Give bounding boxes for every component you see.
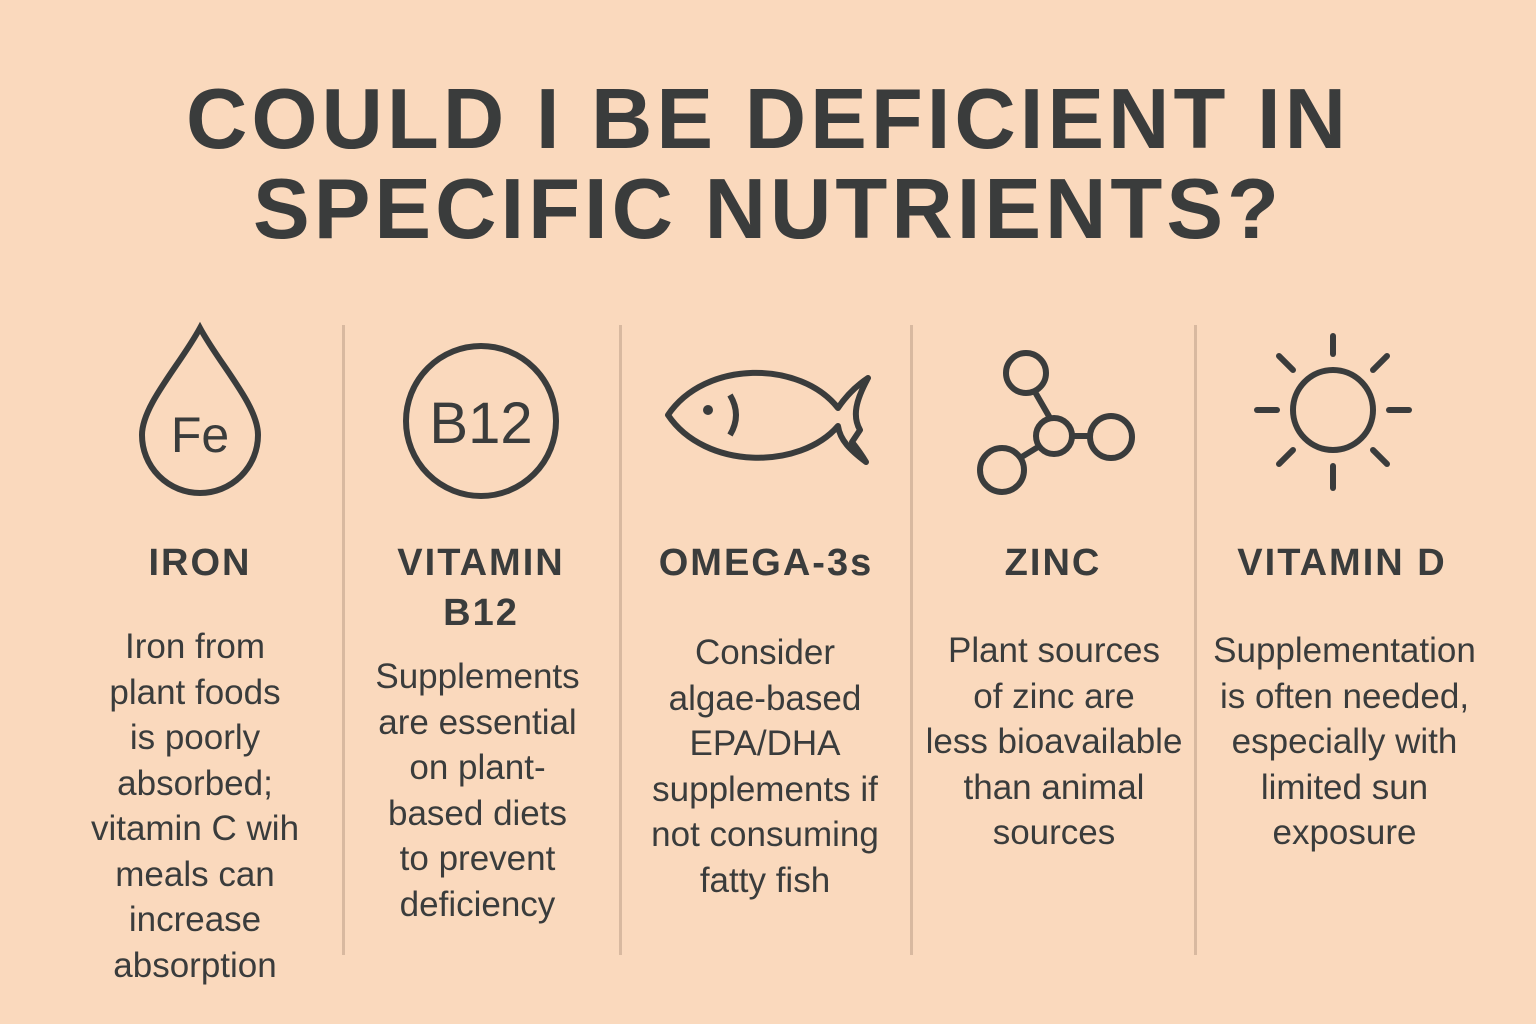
body: iron: absorption — [113, 946, 277, 984]
body: vitamin d: Supplementation — [1213, 631, 1476, 670]
body: b12: deficiency — [400, 884, 555, 924]
body: omega: EPA/DHA — [689, 724, 841, 763]
body: iron: increase — [129, 900, 261, 939]
body: vitamin d: limited sun — [1261, 768, 1428, 806]
body: iron: is poorly — [130, 718, 260, 757]
body: zinc: sources — [993, 813, 1115, 852]
body: omega: supplements if — [652, 770, 878, 808]
icon: sun — [1254, 333, 1412, 491]
heading: zinc: ZINC — [1005, 542, 1101, 584]
heading: vitamin d: VITAMIN D — [1237, 542, 1447, 584]
body: iron: vitamin C wih — [91, 809, 299, 848]
body: b12: on plant- — [409, 748, 546, 787]
icon: iron drop: Fe — [171, 407, 229, 463]
heading: b12 — [397, 542, 565, 634]
icon: iron drop — [139, 322, 261, 496]
body: b12: to prevent — [400, 839, 555, 878]
body: omega: fatty fish — [700, 860, 830, 900]
body: vitamin d: exposure — [1272, 813, 1416, 852]
icon: B12 circle — [403, 343, 559, 499]
body: vitamin d: is often needed, — [1220, 676, 1469, 716]
body: zinc — [926, 631, 1182, 852]
icon: B12 circle: B12 — [429, 391, 533, 456]
body: b12: Supplements — [375, 657, 580, 696]
body: iron — [91, 627, 299, 984]
body: iron: absorbed; — [117, 764, 273, 802]
body: b12: based diets — [388, 794, 567, 832]
title: COULD I BE DEFICIENT IN — [186, 72, 1350, 167]
body: zinc: less bioavailable — [926, 722, 1182, 761]
body: b12 — [375, 657, 580, 924]
body: zinc: Plant sources — [948, 631, 1160, 670]
heading: b12: B12 — [443, 592, 519, 634]
body: iron: plant foods — [109, 672, 281, 712]
body: vitamin d — [1213, 631, 1476, 852]
body: omega: not consuming — [651, 815, 879, 854]
icon: fish — [665, 370, 871, 465]
body: iron: Iron from — [125, 627, 265, 666]
title — [186, 72, 1350, 257]
body: omega — [651, 633, 879, 900]
body: iron: meals can — [115, 854, 275, 894]
body: vitamin d: especially with — [1232, 722, 1457, 761]
body: zinc: of zinc are — [973, 676, 1135, 716]
body: omega: Consider — [695, 633, 835, 672]
title: SPECIFIC NUTRIENTS? — [253, 162, 1283, 257]
body: zinc: than animal — [964, 768, 1144, 806]
heading: omega: OMEGA-3s — [659, 542, 873, 584]
heading: iron: IRON — [148, 542, 252, 584]
heading: b12: VITAMIN — [397, 542, 565, 584]
body: b12: are essential — [378, 702, 577, 742]
body: omega: algae-based — [669, 678, 861, 718]
icon: zinc molecule — [977, 350, 1135, 495]
